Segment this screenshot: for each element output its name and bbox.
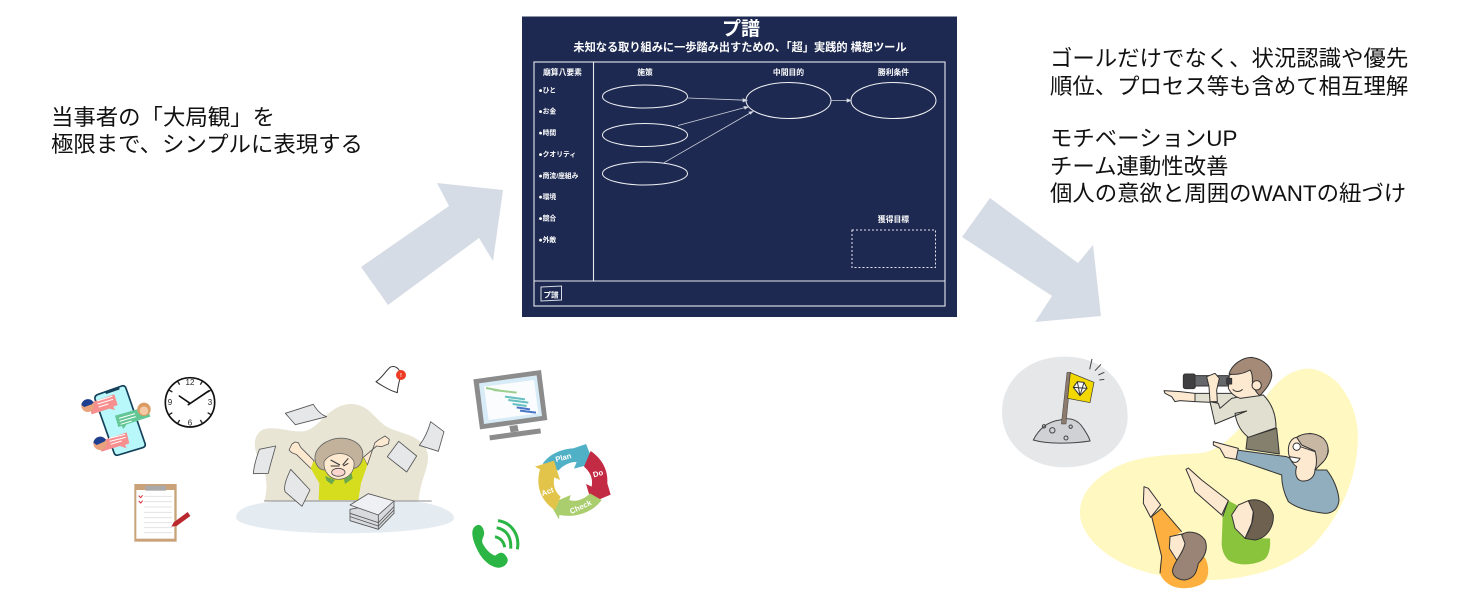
list: eight elements: ●クオリティ — [538, 150, 576, 158]
arrow: from left illustration to panel — [361, 183, 503, 305]
panel title: プ譜 — [722, 18, 760, 40]
icon: goal flag on moon mound — [1002, 357, 1128, 467]
list: eight elements: ●外敵 — [538, 235, 556, 244]
segment: check — [550, 493, 602, 519]
illustration: person figure — [289, 436, 389, 500]
column headings: 獲得目標 — [878, 214, 909, 224]
illustration: overwhelmed person at desk — [236, 404, 454, 533]
hair — [315, 438, 363, 470]
illustration: yellow background blob — [1080, 369, 1358, 580]
segment: plan — [543, 444, 594, 471]
flow diagram arrows — [664, 98, 851, 163]
column headings: 施策 — [637, 67, 653, 77]
small logo — [541, 286, 562, 301]
column headings: 勝利条件 — [878, 67, 909, 77]
chart: PDCA cycle: Do — [592, 468, 604, 479]
icon: clock: 3 — [208, 398, 213, 407]
text block: right description: ゴールだけでなく、状況認識や優先 — [1050, 46, 1408, 71]
list: eight elements: ●競合 — [538, 214, 556, 222]
collar — [325, 476, 335, 484]
text block: left description: 当事者の「大局観」を — [51, 105, 275, 130]
background blob — [255, 404, 428, 501]
icon: clipboard checklist with pencil — [134, 484, 190, 542]
chart: PDCA cycle: Check — [568, 498, 594, 516]
dashed goal box — [852, 230, 936, 268]
shirt — [311, 453, 367, 500]
flow diagram ellipses — [602, 82, 936, 185]
text block: left description: 極限まで、シンプルに表現する — [51, 132, 363, 157]
icon: clock — [165, 378, 215, 427]
face — [324, 454, 354, 479]
chat bubble top — [81, 394, 118, 414]
list: eight elements: ●お金 — [538, 106, 556, 116]
list: eight elements — [538, 86, 579, 244]
desk — [236, 501, 454, 533]
icon: notification bell: ! — [400, 373, 402, 379]
panel: プ譜 tool — [522, 16, 957, 317]
panel frame — [534, 62, 945, 306]
panel subtitle: 未知なる取り組みに一歩踏み出すための、「超」実践的 構想ツール — [573, 40, 907, 54]
list: eight elements: ●ひと — [538, 86, 556, 94]
chat bubble middle — [115, 403, 151, 429]
column headings: 廟算八要素 — [543, 67, 582, 77]
icon: smartphone with chat bubbles — [81, 386, 151, 455]
segment: act — [535, 461, 561, 510]
chart: PDCA cycle: Plan — [554, 451, 573, 464]
chart: PDCA cycle — [535, 444, 611, 519]
gantt bars — [486, 388, 536, 413]
column headings: 中間目的 — [773, 67, 804, 77]
chart: PDCA cycle: Act — [540, 485, 555, 498]
illustration: person with glasses — [1213, 433, 1339, 513]
text block: right description: モチベーションUP — [1050, 126, 1237, 151]
paper stack — [350, 494, 394, 529]
arrow: from panel to right illustration — [962, 198, 1101, 322]
icon: green telephone — [472, 521, 518, 568]
illustration: flying papers and stack — [253, 404, 444, 529]
list: eight elements: ●商流/座組み — [538, 171, 579, 180]
text block: right description: 個人の意欲と周囲のWANTの紐づけ — [1050, 181, 1406, 206]
icon: clock: 6 — [188, 418, 193, 427]
icon: clock: 12 — [186, 378, 195, 387]
illustration: person in green — [1186, 468, 1273, 564]
segment: do — [584, 451, 611, 503]
small logo: プ譜 — [544, 290, 559, 300]
illustration: person in orange — [1143, 487, 1208, 588]
list: eight elements: ●環境 — [538, 192, 556, 201]
illustration: person with binoculars — [1164, 357, 1279, 454]
chat bubble bottom — [93, 432, 129, 452]
column headings — [543, 67, 909, 224]
icon: monitor with gantt chart — [473, 370, 547, 440]
arms — [289, 436, 389, 469]
text block: right description: 順位、プロセス等も含めて相互理解 — [1050, 74, 1408, 99]
text block: left description — [51, 105, 363, 157]
text block: right description — [1050, 46, 1408, 206]
text block: right description: チーム連動性改善 — [1050, 154, 1228, 179]
list: eight elements: ●時間 — [538, 128, 556, 137]
icon: notification bell — [376, 367, 406, 393]
icon: clock: 9 — [168, 398, 173, 407]
